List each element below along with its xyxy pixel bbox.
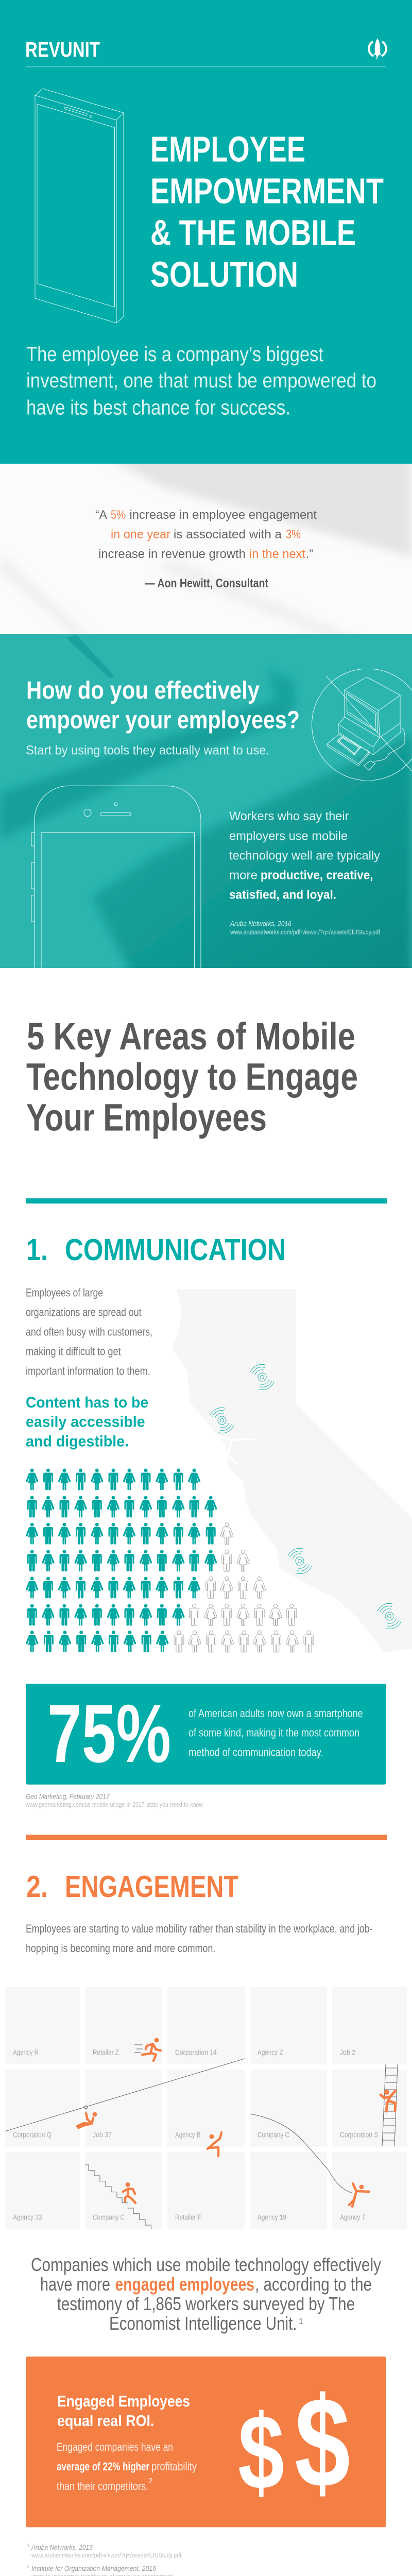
text: communication body: Employees of large: [26, 1286, 103, 1299]
heading: real ROI: equal real ROI.: [57, 2412, 154, 2430]
text: companies statement: 1: [299, 2317, 303, 2326]
title: EMPLOYEE: [150, 129, 305, 170]
figure: hanging person: [208, 2132, 221, 2156]
text: communication body: making it difficult to get: [26, 1345, 121, 1358]
sources: engagement: Institute for Organization Management, 2016: [31, 2564, 156, 2572]
grid: job tiles illustration: Corporation 14: [175, 2048, 217, 2057]
pictogram: filled and outlined people: [26, 1468, 314, 1652]
section heading: engagement: ENGAGEMENT: [65, 1870, 238, 1904]
grid: job tiles illustration: Job 2: [340, 2048, 355, 2057]
text: engagement intro: hopping is becoming more and more common.: [26, 1942, 215, 1955]
illustration: descending curve and falling figure: [250, 2114, 369, 2207]
grid: job tiles illustration: Retailer Z: [93, 2048, 119, 2057]
icon: dollar signs: $: [238, 2393, 284, 2512]
text: workers statement: Workers who say their: [229, 809, 349, 823]
grid: job tiles illustration: Job 37: [93, 2131, 112, 2140]
illustration: ladder and climber: [381, 2064, 398, 2146]
section heading: engagement: [26, 1870, 238, 1904]
quote: is associated with a: [174, 528, 282, 541]
icon: rocket logo: [369, 38, 386, 60]
intro text: [26, 343, 376, 419]
illustration: zipline: [5, 2059, 245, 2131]
heading: real ROI: Engaged Employees: [57, 2392, 190, 2410]
quote attribution: — Aon Hewitt, Consultant: [145, 577, 268, 590]
figure: runner: [134, 2038, 161, 2061]
sources: engagement: www.arubanetworks.com/pdf-viewer/?q=/assets/EIUStudy.pdf: [31, 2551, 181, 2559]
text: workers statement: satisfied, and loyal.: [229, 888, 336, 902]
intro text: The employee is a company’s biggest: [26, 343, 323, 366]
text: content callout: and digestible.: [26, 1433, 129, 1450]
text: content callout: Content has to be: [26, 1394, 148, 1411]
source: Geo Marketing: Geo Marketing, February 2017: [26, 1792, 110, 1800]
text: companies statement: testimony of 1,865 workers surveyed by The: [57, 2293, 355, 2314]
section heading: communication: COMMUNICATION: [65, 1233, 286, 1267]
logo: RevUnit wordmark: REVUNIT: [25, 38, 100, 61]
quote: in the next: [249, 547, 305, 561]
grid: job tiles illustration: Corporation Q: [13, 2131, 52, 2140]
text: companies statement: [31, 2254, 381, 2334]
quote: 3%: [286, 528, 301, 541]
title: [150, 129, 384, 294]
text: profitability: [57, 2441, 197, 2493]
text: smartphone stat: of American adults now own a smartphone: [188, 1707, 363, 1720]
text: content callout: easily accessible: [26, 1414, 145, 1431]
text: profitability: 2: [148, 2477, 152, 2485]
title: SOLUTION: [150, 254, 298, 294]
subheading: Start by using tools they actually want to use.: [26, 743, 269, 757]
grid: job tiles illustration: Agency B: [175, 2131, 201, 2140]
heading: 5 key areas: [26, 1015, 358, 1139]
text: communication body: important information to them.: [26, 1365, 150, 1378]
map: California silhouette: [172, 1289, 412, 1652]
grid: job tiles illustration: Company C: [258, 2131, 289, 2140]
panel: teal hero: [0, 0, 412, 464]
text: profitability: profitability: [151, 2460, 197, 2473]
panel: 75% stat: [26, 1684, 386, 1785]
text: smartphone stat: [188, 1707, 363, 1759]
text: workers statement: more: [229, 868, 258, 882]
text: workers statement: technology well are typically: [229, 849, 380, 862]
sources: engagement: Aruba Networks, 2016: [31, 2543, 93, 2551]
quote: “A: [95, 508, 107, 522]
quote: increase in revenue growth: [98, 547, 246, 561]
panel: blurred desk photo, light part: [0, 453, 412, 639]
text: companies statement: , according to the: [255, 2274, 372, 2295]
text: companies statement: engaged employees: [115, 2274, 254, 2295]
illustration: stairs and walker: [85, 2165, 151, 2229]
heading: how do you empower: [26, 677, 300, 734]
text: companies statement: Economist Intelligence Unit.: [109, 2313, 297, 2334]
grid: job tiles illustration: Agency R: [13, 2048, 39, 2057]
text: profitability: than their competitors.: [57, 2480, 148, 2493]
grid: job tiles illustration: Retailer F: [175, 2213, 201, 2222]
icon: large phone outline: [31, 786, 201, 968]
title: & THE MOBILE: [150, 213, 356, 253]
text: communication body: and often busy with customers,: [26, 1325, 152, 1338]
text: workers statement: employers use mobile: [229, 829, 348, 843]
quote: increase in employee engagement: [130, 508, 317, 522]
grid: job tiles illustration: Agency 7: [340, 2213, 365, 2222]
grid: job tiles illustration: Agency 33: [13, 2213, 42, 2222]
source: Aruba Networks: www.arubanetworks.com/pdf-viewer/?q=/assets/EIUStudy.pdf: [230, 928, 380, 936]
panel: blurred desk photo, teal part: [0, 634, 412, 979]
text: communication body: organizations are spread out: [26, 1306, 141, 1319]
text: smartphone stat: of some kind, making it the most common: [188, 1726, 359, 1739]
text: content callout: [26, 1394, 148, 1450]
grid: job tiles illustration: Corporation S: [340, 2131, 378, 2140]
heading: real ROI: [57, 2392, 190, 2430]
section heading: communication: 1.: [26, 1233, 48, 1267]
quote: .”: [306, 547, 313, 561]
icon: signal markers: [210, 1364, 401, 1629]
heading: 5 key areas: 5 Key Areas of Mobile: [27, 1015, 355, 1058]
grid: job tiles illustration: Agency 19: [258, 2213, 286, 2222]
source: Aruba Networks: [230, 920, 380, 936]
sources: engagement: [27, 2543, 181, 2576]
panel: ROI callout: [26, 2357, 386, 2527]
icon: dollar signs: $: [295, 2370, 350, 2514]
icon: crossed-out desktop computer: [312, 669, 412, 781]
heading: how do you empower: empower your employees?: [26, 706, 300, 734]
heading: how do you empower: How do you effectively: [26, 677, 260, 704]
source: Geo Marketing: www.geomarketing.com/us-mobile-usage-in-2017-stats-you-need-to-know: [25, 1801, 203, 1808]
quote: 5%: [111, 508, 126, 522]
text: engagement intro: [26, 1922, 373, 1955]
sources: engagement: 1: [27, 2543, 30, 2549]
text: workers statement: productive, creative,: [261, 868, 373, 882]
text: companies statement: have more: [40, 2274, 110, 2295]
grid: job tiles illustration: Company C: [93, 2213, 125, 2222]
heading: 5 key areas: Your Employees: [26, 1096, 267, 1139]
text: profitability: average of 22% higher: [57, 2460, 149, 2473]
sources: engagement: 2: [27, 2564, 30, 2570]
text: smartphone stat: method of communication today.: [188, 1746, 323, 1759]
quote: [95, 508, 317, 561]
source: Aruba Networks: Aruba Networks, 2016: [230, 920, 291, 928]
icon: dollar signs: [238, 2370, 350, 2514]
icon: isometric phone outline: [35, 89, 124, 323]
section heading: engagement: 2.: [26, 1870, 48, 1904]
intro text: have its best chance for success.: [26, 396, 290, 419]
text: communication body: [26, 1286, 152, 1378]
grid: job tiles illustration: Agency Z: [258, 2048, 283, 2057]
source: Geo Marketing: [25, 1792, 203, 1808]
text: profitability: Engaged companies have an: [57, 2441, 173, 2453]
grid: job tiles illustration: [5, 1987, 407, 2229]
stat: 75%: 75%: [47, 1687, 171, 1780]
quote: in one year: [111, 528, 170, 541]
text: workers statement: [229, 809, 380, 902]
